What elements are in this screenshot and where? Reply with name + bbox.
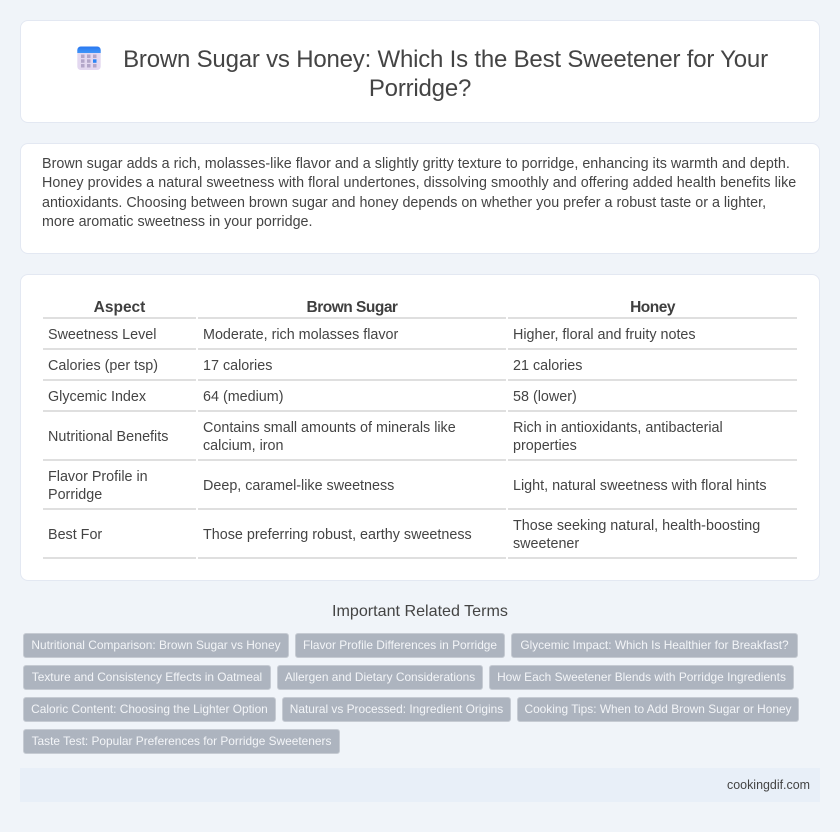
tag: Cooking Tips: When to Add Brown Sugar or Honey: [524, 702, 792, 716]
row: nutritional benefits: properties: [513, 438, 577, 454]
tag: Glycemic Impact: Which Is Healthier for Breakfast?: [520, 638, 789, 652]
footer text: cookingdif.com: [727, 778, 810, 792]
row: sweetness level: Higher, floral and fruity notes: [513, 327, 696, 343]
row: nutritional benefits: [48, 420, 723, 454]
row: flavor profile: Deep, caramel-like sweetness: [203, 478, 394, 494]
row: best for: Best For: [48, 527, 102, 543]
tag: [489, 665, 794, 690]
intro text: [42, 156, 796, 230]
row: flavor profile: [48, 469, 767, 503]
tag: [23, 697, 276, 722]
tag: Nutritional Comparison: Brown Sugar vs Honey: [31, 638, 281, 652]
title: Porridge?: [369, 75, 471, 102]
table header: [94, 299, 676, 316]
intro text: antioxidants. Choosing between brown sugar and honey depends on whether you prefer a robust taste or a lighter,: [42, 195, 766, 211]
title: [123, 46, 768, 102]
tag: [277, 665, 483, 690]
tag: Allergen and Dietary Considerations: [285, 670, 475, 684]
header panel: [20, 20, 820, 123]
row: sweetness level: [48, 327, 696, 343]
footer bar: [20, 768, 820, 802]
row: best for: sweetener: [513, 536, 579, 552]
row: glycemic index: Glycemic Index: [48, 389, 146, 405]
row: calories: [48, 358, 582, 374]
row: nutritional benefits: Rich in antioxidants, antibacterial: [513, 420, 723, 436]
tag: [295, 633, 505, 658]
row: glycemic index: 58 (lower): [513, 389, 577, 405]
row: nutritional benefits: Nutritional Benefits: [48, 429, 168, 445]
table header: Aspect: [94, 299, 145, 316]
intro text: Honey provides a natural sweetness with floral undertones, dissolving smoothly and offering added health benefits like: [42, 175, 796, 191]
tag: Caloric Content: Choosing the Lighter Option: [31, 702, 268, 716]
tag: [23, 665, 271, 690]
tag: [511, 633, 798, 658]
row: glycemic index: 64 (medium): [203, 389, 284, 405]
intro panel: [20, 143, 820, 254]
row: nutritional benefits: calcium, iron: [203, 438, 284, 454]
row: calories: 21 calories: [513, 358, 582, 374]
row: best for: Those seeking natural, health-boosting: [513, 518, 760, 534]
row: flavor profile: Porridge: [48, 487, 102, 503]
row: glycemic index: [48, 389, 577, 405]
row: flavor profile: Flavor Profile in: [48, 469, 148, 485]
comparison table panel: [20, 274, 820, 581]
tag: [23, 729, 340, 754]
tag: Flavor Profile Differences in Porridge: [303, 638, 497, 652]
row: best for: Those preferring robust, earthy sweetness: [203, 527, 472, 543]
row: flavor profile: Light, natural sweetness with floral hints: [513, 478, 767, 494]
table header: Brown Sugar: [307, 299, 397, 316]
row: nutritional benefits: Contains small amounts of minerals like: [203, 420, 456, 436]
intro text: more aromatic sweetness in your porridge.: [42, 214, 312, 230]
related terms tags: [23, 633, 799, 754]
tag: Texture and Consistency Effects in Oatmeal: [32, 670, 262, 684]
tag: [23, 633, 289, 658]
tag: [517, 697, 799, 722]
tag: [282, 697, 511, 722]
icon: calendar: [77, 46, 101, 70]
row: best for: [48, 518, 760, 552]
related terms heading: Important Related Terms: [332, 602, 508, 620]
title: Brown Sugar vs Honey: Which Is the Best Sweetener for Your: [123, 46, 768, 73]
row: sweetness level: Sweetness Level: [48, 327, 156, 343]
tag: Taste Test: Popular Preferences for Porridge Sweeteners: [32, 734, 331, 748]
comparison table: [43, 299, 797, 559]
row: calories: 17 calories: [203, 358, 272, 374]
row: sweetness level: Moderate, rich molasses flavor: [203, 327, 398, 343]
table header: Honey: [630, 299, 675, 316]
intro text: Brown sugar adds a rich, molasses-like flavor and a slightly gritty texture to porridge, enhancing its warmth and depth.: [42, 156, 790, 172]
tag: Natural vs Processed: Ingredient Origins: [290, 702, 503, 716]
row: calories: Calories (per tsp): [48, 358, 158, 374]
tag: How Each Sweetener Blends with Porridge Ingredients: [497, 670, 786, 684]
